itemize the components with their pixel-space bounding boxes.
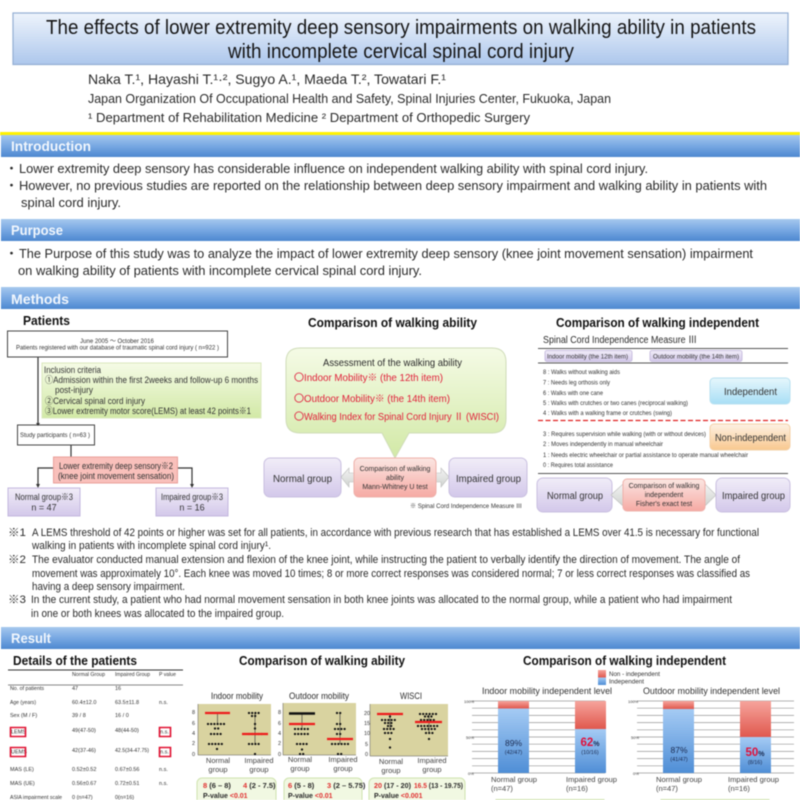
section header: Introduction: Introduction <box>11 138 91 154</box>
arrowheads <box>36 423 194 488</box>
chart: indoor mobility independent level: (42/47) <box>505 750 522 756</box>
chart: indoor mobility independent level: (n=47) <box>491 784 513 793</box>
non-independent box <box>710 424 790 450</box>
normal group box <box>8 488 80 516</box>
table text: UEMS <box>11 750 27 756</box>
result box: WISCI <box>369 778 465 800</box>
chart: outdoor mobility: Normal <box>288 755 312 764</box>
chart: outdoor mobility independent level: Normal group <box>656 775 702 784</box>
chart: indoor mobility: group <box>208 765 228 774</box>
result box: WISCI: 16.5 (13 - 19.75) <box>414 781 463 790</box>
purpose text: on walking ability of patients with incomplete cervical spinal cord injury. <box>18 263 422 278</box>
study participants box: Study participants ( n=63 ) <box>20 433 90 439</box>
chart: outdoor mobility: 4 <box>278 731 281 737</box>
normal group box: n = 47 <box>31 502 57 512</box>
chart: outdoor mobility: 0 <box>278 752 281 758</box>
chart: indoor mobility independent level: 100% <box>464 699 475 704</box>
independent levels: 5 : Walks with crutches or two canes (reciprocal walking) <box>543 401 688 407</box>
result box: WISCI: P-value <0.001 <box>374 793 423 800</box>
title: The effects of lower extremity deep sensory impairments on walking ability in patients <box>46 17 756 39</box>
chart: WISCI: 5 <box>365 742 368 748</box>
chart: indoor mobility: Indoor mobility <box>211 691 263 701</box>
chart: indoor mobility: 2 <box>192 741 195 747</box>
registry box: June 2005 〜 October 2016 <box>80 339 155 345</box>
table text: 16 / 0 <box>115 713 129 719</box>
table text: 0.52±0.52 <box>72 767 96 773</box>
table text: n.s. <box>159 781 168 787</box>
footnote SCIM: ※ Spinal Cord Independence Measure Ⅲ <box>410 503 522 510</box>
non-independent levels: 0 : Requires total assistance <box>543 463 614 469</box>
table text: 16 <box>115 686 121 692</box>
chart: outdoor mobility independent level: 50% <box>745 747 765 759</box>
independent box: Independent <box>724 387 777 398</box>
chart: indoor mobility: 4 <box>192 731 195 737</box>
introduction text <box>5 161 767 210</box>
chart: outdoor mobility independent level: Outdoor mobility independent level <box>643 686 780 697</box>
table text: Age (years) <box>10 700 36 706</box>
panel: comparison of walking ability results <box>192 653 465 800</box>
table text: 42(37-46) <box>72 748 96 754</box>
chart: indoor mobility: Impaired <box>244 756 274 765</box>
purpose text: The Purpose of this study was to analyze the impact of lower extremity deep sensory (knee joint movement sensation) impairment <box>19 246 753 261</box>
inclusion criteria box: post-injury <box>55 385 93 395</box>
impaired group box: Impaired group※3 <box>161 492 223 502</box>
chart: outdoor mobility: Impaired <box>328 755 358 764</box>
statistical test box <box>623 479 705 511</box>
introduction text: ・ <box>5 178 18 193</box>
footnotes: ※2 <box>8 554 26 566</box>
non-independent levels: 3 : Requires supervision while walking (with or without devices) <box>543 432 706 438</box>
result box: outdoor: 6 (5 - 8) <box>288 781 315 790</box>
impaired group: Impaired group <box>456 474 521 485</box>
introduction text: ・ <box>5 161 18 176</box>
chart: indoor mobility independent level: Impaired group <box>566 775 617 784</box>
panel: patients flowchart <box>8 313 261 516</box>
heading: Details of the patients <box>13 653 137 668</box>
chart: indoor mobility independent level <box>464 686 617 793</box>
authors and affiliations: Naka T.¹, Hayashi T.¹·², Sugyo A.¹, Maeda T.², Towatari F.¹ <box>88 71 446 87</box>
result box: outdoor <box>284 778 366 800</box>
introduction text: Lower extremity deep sensory has considerable influence on independent walking ability with spinal cord injury. <box>19 161 648 176</box>
table text: 60.4±12.0 <box>72 700 96 706</box>
section header: Methods: Methods <box>11 291 69 307</box>
section header: Result <box>1 627 800 649</box>
table text: 47 <box>72 686 78 692</box>
authors and affiliations: Japan Organization Of Occupational Health and Safety, Spinal Injuries Center, Fukuoka, Japan <box>88 91 611 106</box>
chart: outdoor mobility <box>278 691 358 773</box>
registry box <box>8 331 228 357</box>
impaired group <box>449 458 527 497</box>
independent levels <box>543 370 688 417</box>
chart: WISCI: WISCI <box>400 691 422 701</box>
statistical test box: independent <box>645 492 683 499</box>
chart: outdoor mobility independent level: 0% <box>633 771 639 776</box>
item pills <box>545 350 742 362</box>
independent levels: 7 : Needs leg orthosis only <box>543 380 610 386</box>
statistical test box: Comparison of walking <box>629 483 700 490</box>
chart: indoor mobility independent level: Indoor mobility independent level <box>482 686 612 697</box>
statistical test box: Fisher's exact test <box>636 501 692 508</box>
non-independent box: Non-independent <box>715 433 786 444</box>
red dashed threshold <box>538 420 788 422</box>
table text: Normal Group <box>72 672 105 678</box>
registry box: Patients registered with our database of traumatic spinal cord injury ( n=922 ) <box>16 346 219 352</box>
purpose text <box>5 246 753 278</box>
result box: indoor <box>197 778 276 800</box>
chart: outdoor mobility independent level: (8/16) <box>748 760 762 766</box>
section header: Purpose: Purpose <box>11 222 63 238</box>
heading: Comparison of walking ability <box>239 653 406 668</box>
statistical test box: Comparison of walking <box>360 466 431 473</box>
table text: 48(44-50) <box>115 728 139 734</box>
authors and affiliations: ¹ Department of Rehabilitation Medicine ² Department of Orthopedic Surgery <box>88 110 530 125</box>
legend <box>598 670 660 686</box>
result box: WISCI: 20 (17 - 20) <box>374 781 411 790</box>
table text: n.s. <box>159 700 168 706</box>
panel: comparison of walking independent design <box>537 315 790 512</box>
assessment callout: Indoor Mobility※ (the 12th item) <box>304 373 443 384</box>
title <box>13 13 788 64</box>
section header: Introduction <box>1 135 800 157</box>
result box: indoor: 4 (2 - 7.5) <box>243 781 276 790</box>
table text: 49(47-50) <box>72 728 96 734</box>
chart: indoor mobility independent level: 89% <box>505 738 522 748</box>
footnotes: ※1 <box>8 527 26 539</box>
statistical test box: Mann-Whitney U test <box>362 484 428 491</box>
chart: outdoor mobility: group <box>290 764 310 773</box>
chart: indoor mobility <box>192 691 274 774</box>
chart: WISCI: 0 <box>365 752 368 758</box>
introduction text: spinal cord injury. <box>21 195 121 210</box>
study participants box <box>18 425 94 445</box>
chart: outdoor mobility: 8 <box>278 710 281 716</box>
legend: Independent <box>609 680 644 686</box>
result boxes cut off at page edge <box>496 800 769 801</box>
statistical test box: ability <box>386 475 404 482</box>
non-independent levels <box>543 432 748 469</box>
statistical test box <box>354 458 436 497</box>
assessment callout: Walking Index for Spinal Cord Injury Ⅱ (WISCI) <box>304 412 499 423</box>
chart: outdoor mobility independent level: (n=47) <box>656 784 678 793</box>
legend: Non - independent <box>609 672 660 678</box>
heading: Comparison of walking ability <box>308 315 478 330</box>
yellow divider <box>0 132 800 136</box>
arrows <box>341 468 449 487</box>
table text: 0.67±0.56 <box>115 767 139 773</box>
chart: WISCI: Impaired <box>417 756 447 765</box>
chart: indoor mobility: Normal <box>206 756 230 765</box>
chart: outdoor mobility: group <box>333 764 353 773</box>
result box: indoor: 8 (6 – 8) <box>203 781 231 790</box>
section header: Result: Result <box>11 630 51 646</box>
inclusion criteria box <box>42 363 261 418</box>
chart: indoor mobility independent level: 62% <box>580 737 600 749</box>
deep sensory box: (knee joint movement sensation) <box>58 471 174 481</box>
result box: outdoor: 3 (2 – 5.75) <box>327 781 366 790</box>
table text: P value <box>159 672 176 678</box>
table text: 42.5(34-47.75) <box>115 748 149 754</box>
chart: indoor mobility independent level: 50% <box>466 735 474 740</box>
item pills: Indoor mobility (the 12th item) <box>547 354 628 360</box>
table text: MAS (UE) <box>10 781 35 787</box>
red highlight boxes <box>10 728 170 756</box>
panel: details of the patients table <box>8 653 183 800</box>
inclusion criteria box: ②Cervical spinal cord injury <box>45 396 145 406</box>
impaired group: Impaired group <box>722 491 785 502</box>
chart: outdoor mobility independent level: 87% <box>670 745 688 755</box>
chart: indoor mobility independent level: (10/16) <box>581 750 599 756</box>
chart: indoor mobility independent level: (n=16) <box>566 784 588 793</box>
footnotes: walking in patients with incomplete spinal cord injury¹. <box>31 540 271 552</box>
introduction text: However, no previous studies are reported on the relationship between deep sensory impairment and walking ability in patients with <box>19 178 767 193</box>
deep sensory box: Lower extremity deep sensory※2 <box>59 461 173 471</box>
heading: Comparison of walking independent <box>556 315 760 330</box>
impaired group box <box>156 488 228 516</box>
chart: WISCI: group <box>422 765 442 774</box>
footnotes: ※3 <box>8 594 26 606</box>
inclusion criteria box: Inclusion criteria <box>44 365 101 375</box>
panel: comparison of walking independent results <box>464 653 794 800</box>
chart: WISCI: Normal <box>379 757 403 766</box>
table text: 0.56±0.67 <box>72 781 96 787</box>
normal group <box>537 478 612 512</box>
footnotes: in one or both knees was allocated to the impaired group. <box>31 608 284 620</box>
chart: outdoor mobility independent level <box>628 686 794 793</box>
result box: outdoor: P-value <0.01 <box>288 793 333 800</box>
inclusion criteria box: ①Admission within the first 2weeks and follow-up 6 months <box>45 375 258 385</box>
table text <box>10 672 176 800</box>
chart: indoor mobility independent level: Normal group <box>491 775 537 784</box>
chart: WISCI: 20 <box>364 711 370 717</box>
footnotes: The evaluator conducted manual extension and flexion of the knee joint, while instructing the patient to verbally identify the direction of movement. The angle of <box>32 554 741 566</box>
footnotes: In the current study, a patient who had normal movement sensation in both knee joints was allocated to the normal group, while a patient who had impairment <box>31 594 732 606</box>
chart: outdoor mobility: 6 <box>278 721 281 727</box>
non-independent levels: 1 : Needs electric wheelchair or partial assistance to operate manual wheelchair <box>543 453 748 459</box>
chart: WISCI: 15 <box>364 721 370 727</box>
table text: 39 / 8 <box>72 713 86 719</box>
independent box <box>710 378 790 404</box>
chart: outdoor mobility independent level: 100% <box>628 699 639 704</box>
chart: WISCI: 10 <box>364 731 370 737</box>
item pills: Outdoor mobility (the 14th item) <box>653 354 739 360</box>
inclusion criteria box: ③Lower extremity motor score(LEMS) at least 42 points※1 <box>45 406 251 416</box>
impaired group box: n = 16 <box>179 502 205 512</box>
normal group: Normal group <box>273 474 332 485</box>
chart: indoor mobility: group <box>249 765 269 774</box>
chart: outdoor mobility independent level: (41/47) <box>670 757 688 763</box>
chart: outdoor mobility: 2 <box>278 741 281 747</box>
assessment callout <box>286 348 506 458</box>
table text: MAS (LE) <box>10 767 34 773</box>
chart: indoor mobility independent level: 0% <box>468 771 474 776</box>
independent levels: 4 : Walks with a walking frame or crutches (swing) <box>543 411 672 417</box>
chart: indoor mobility: 8 <box>192 710 195 716</box>
footnotes: having a deep sensory impairment. <box>32 581 185 593</box>
non-independent levels: 2 : Moves independently in manual wheelchair <box>543 442 663 448</box>
chart: outdoor mobility independent level: 50% <box>631 735 639 740</box>
deep sensory box <box>54 457 178 483</box>
purpose text: ・ <box>5 246 18 261</box>
title: with incomplete cervical spinal cord injury <box>227 41 574 63</box>
normal group: Normal group <box>547 491 603 502</box>
impaired group <box>716 478 790 512</box>
independent levels: 8 : Walks without walking aids <box>543 370 620 376</box>
assessment callout: Assessment of the walking ability <box>323 357 463 369</box>
chart: WISCI: group <box>381 766 401 775</box>
table text: Impaired Group <box>115 672 150 678</box>
panel: comparison of walking ability design <box>264 315 527 510</box>
heading: Patients: Patients <box>23 313 70 328</box>
normal group box: Normal group※3 <box>15 492 73 502</box>
authors and affiliations <box>88 71 611 125</box>
chart: outdoor mobility: Outdoor mobility <box>289 691 349 701</box>
section header: Methods <box>1 287 800 309</box>
section header: Purpose <box>1 219 800 241</box>
footnotes <box>8 527 759 620</box>
table text: n.s. <box>160 750 169 756</box>
arrows <box>611 484 716 506</box>
heading: Comparison of walking independent <box>523 653 727 668</box>
table text: No. of patients <box>10 686 44 692</box>
independent levels: 6 : Walks with one cane <box>543 391 604 397</box>
table text: 63.5±11.8 <box>115 700 139 706</box>
table text: LEMS <box>11 730 26 736</box>
chart: outdoor mobility independent level: Impaired group <box>728 775 779 784</box>
table text: n.s. <box>160 730 169 736</box>
normal group <box>264 458 341 497</box>
table text: n.s. <box>159 767 168 773</box>
chart: indoor mobility: 0 <box>192 752 195 758</box>
result box: indoor: P-value <0.01 <box>203 793 248 800</box>
assessment callout: Outdoor Mobility※ (the 14th item) <box>304 394 450 405</box>
flow connectors <box>38 357 192 485</box>
table text: Sex (M / F) <box>10 713 37 719</box>
chart: outdoor mobility independent level: (n=16) <box>728 784 750 793</box>
chart: indoor mobility: 6 <box>192 721 195 727</box>
table text: 0.72±0.51 <box>115 781 139 787</box>
scale title: Spinal Cord Independence Measure Ⅲ <box>543 335 697 346</box>
chart: WISCI <box>364 691 448 775</box>
